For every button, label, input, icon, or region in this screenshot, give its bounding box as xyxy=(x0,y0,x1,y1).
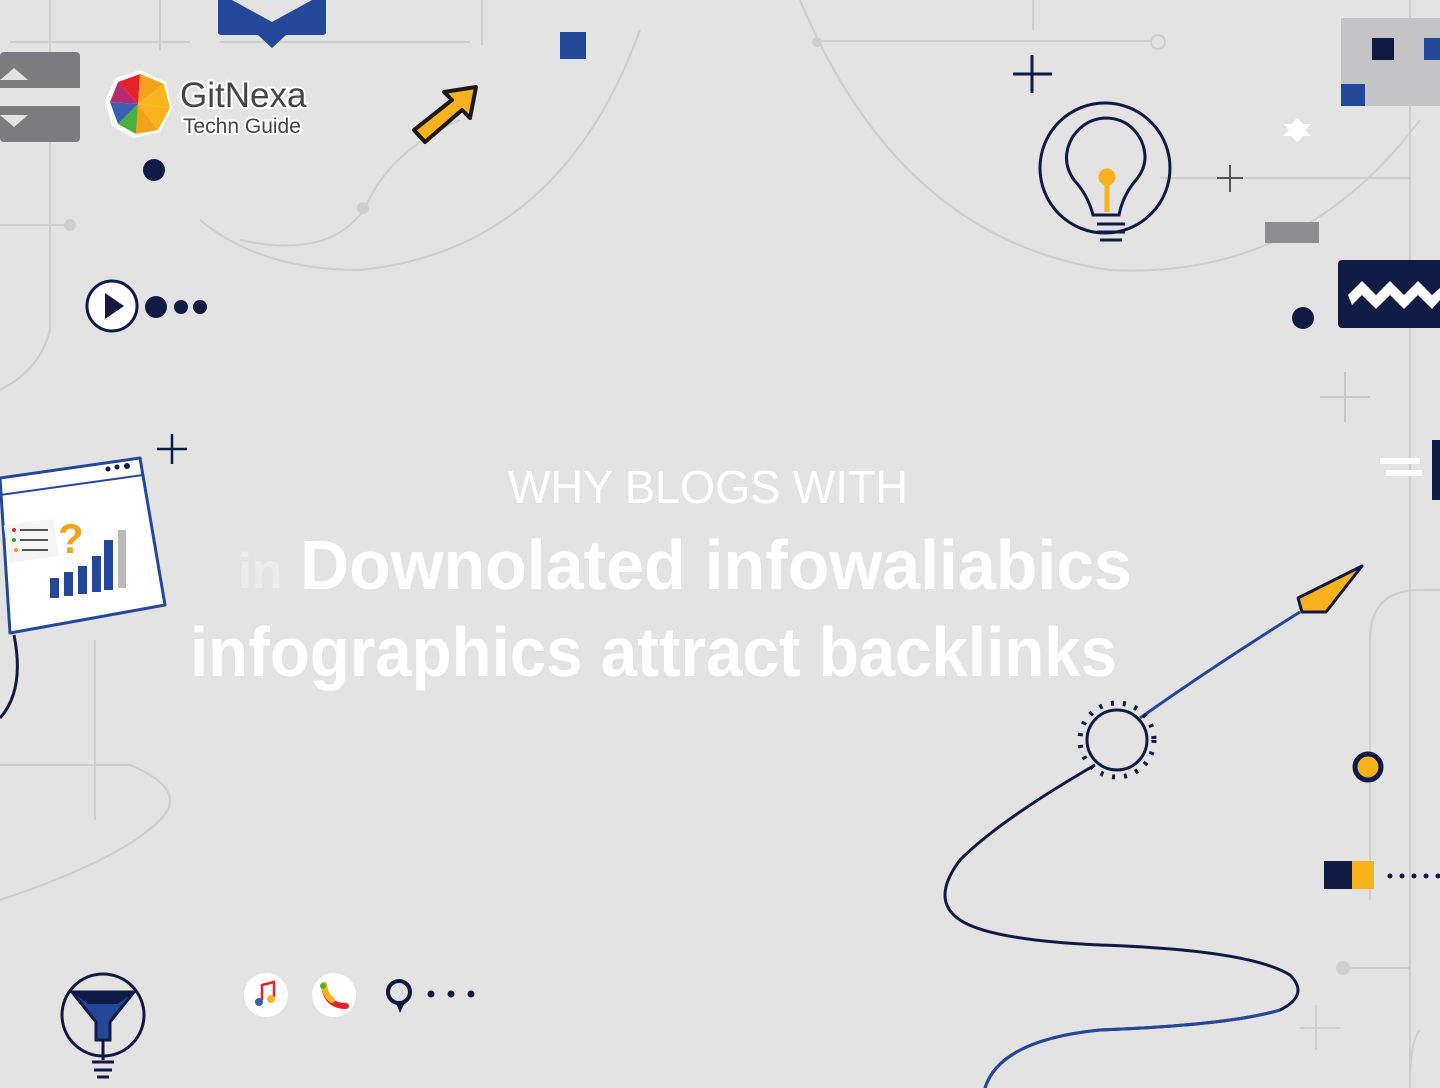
icon: top-right blocks xyxy=(1341,18,1440,106)
title: WHY BLOGS WITH xyxy=(508,461,908,513)
logo xyxy=(105,70,307,138)
icon: light bulb xyxy=(1040,103,1170,240)
icon: rocket path with gear xyxy=(945,566,1362,1088)
icon: zigzag banner xyxy=(1338,260,1440,328)
dot xyxy=(143,159,165,181)
icon: music app xyxy=(244,973,288,1017)
title: in xyxy=(238,543,282,599)
icon: color blocks with dots xyxy=(1324,861,1440,889)
logo: GitNexa xyxy=(180,76,307,115)
icon: plus xyxy=(1013,55,1052,93)
logo: Techn Guide xyxy=(183,115,301,138)
icon: yellow arrow xyxy=(414,87,476,142)
title: Downolated infowaliabics xyxy=(300,526,1132,604)
icon: play button xyxy=(87,281,207,331)
icon: search dots xyxy=(388,981,474,1013)
icon: phone app xyxy=(312,973,356,1017)
icon: blue square xyxy=(560,32,586,59)
title: infographics attract backlinks xyxy=(190,613,1117,691)
icon: browser chart card xyxy=(0,458,165,718)
icon: funnel bulb xyxy=(62,974,144,1077)
title xyxy=(190,461,1132,691)
icon: browser chart card: ? xyxy=(58,515,84,562)
icon: grey expand block xyxy=(0,52,80,142)
icon: blue mail tab xyxy=(218,0,326,48)
